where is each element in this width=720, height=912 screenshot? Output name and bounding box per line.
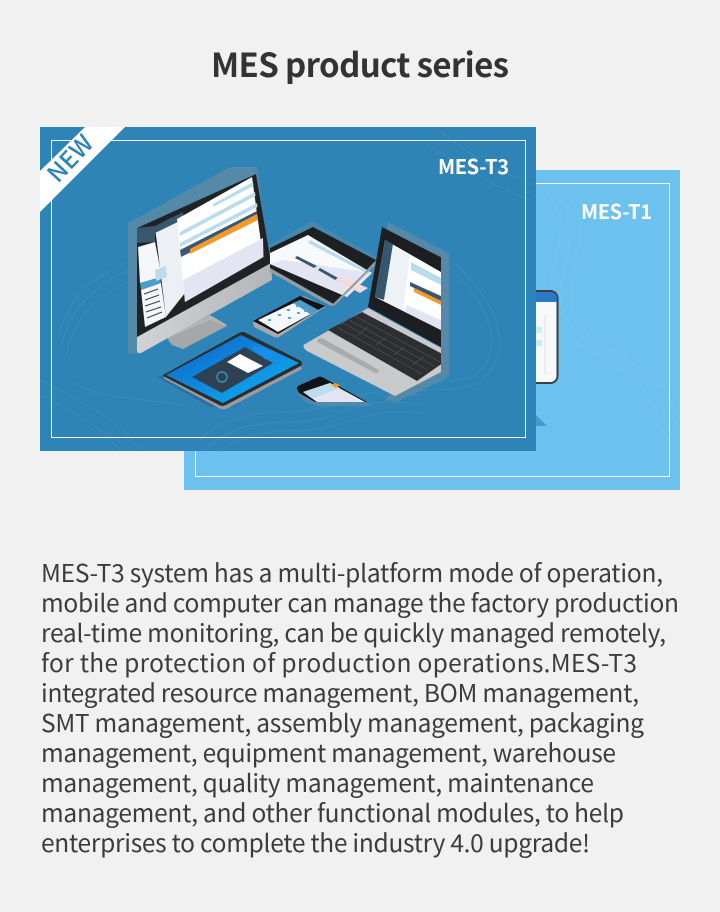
icon: smartphone [253, 296, 325, 338]
text block: description: mobile and computer can manage the factory production [41, 585, 679, 620]
text block: description: real-time monitoring, can be quickly managed remotely, [41, 615, 666, 650]
text block: description: for the protection of production operations.MES-T3 [41, 645, 637, 680]
panel: MES-T1 card [184, 170, 680, 490]
icon: tablet top [270, 221, 378, 306]
panel: MES-T3 card [38, 125, 536, 455]
icon: small phone [297, 377, 372, 406]
icon: monitor behind [500, 291, 558, 426]
MES-T1 label: MES-T1 [581, 196, 652, 225]
text block: description: management, quality management, maintenance [41, 765, 594, 800]
panel: product image cards [40, 127, 680, 490]
text block: description: SMT management, assembly management, packaging [41, 705, 644, 740]
text block: description: management, equipment management, warehouse [41, 735, 616, 770]
text block: description: MES-T3 system has a multi-platform mode of operation, [41, 556, 663, 590]
text block: description: management, and other functional modules, to help [41, 795, 624, 830]
text block: description: integrated resource management, BOM management, [41, 675, 639, 710]
title: MES product series [211, 40, 509, 87]
icon: desktop monitor [128, 167, 272, 354]
text block: description [41, 556, 679, 860]
icon: large tablet with login screen [157, 332, 302, 409]
MES-T3 label: MES-T3 [438, 151, 509, 180]
icon: laptop [303, 222, 450, 402]
text block: description: enterprises to complete the industry 4.0 upgrade! [41, 825, 590, 860]
icon: NEW ribbon [38, 125, 125, 212]
